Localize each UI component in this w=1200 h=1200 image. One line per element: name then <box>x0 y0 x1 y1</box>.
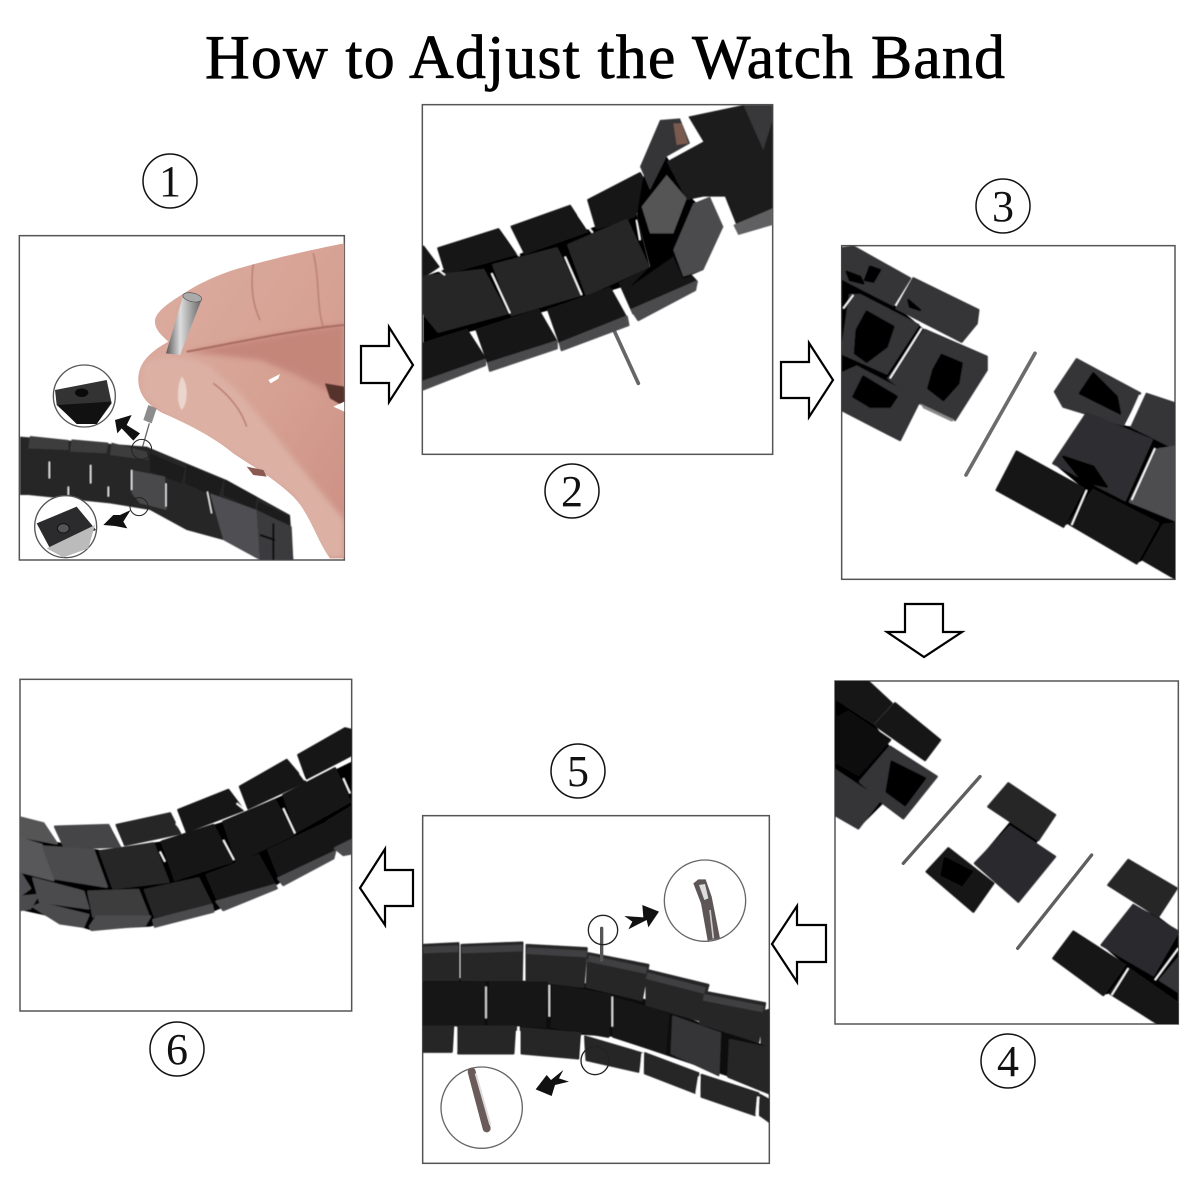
pin B <box>1018 855 1092 948</box>
right links <box>1053 860 1178 1024</box>
left links <box>842 247 987 440</box>
protruding pin <box>600 926 604 962</box>
arrow: step 5 to 6 <box>360 849 413 925</box>
step number 4 <box>981 1034 1035 1088</box>
step number 5 <box>551 744 605 798</box>
finished band <box>21 728 352 930</box>
arrow: step 3 to 4 <box>887 604 962 657</box>
step number 3 <box>976 179 1030 233</box>
arrow: step 4 to 5 <box>772 906 826 982</box>
loose pin <box>966 353 1035 475</box>
step number 2: 2 <box>561 467 583 516</box>
step number 1 <box>143 154 197 208</box>
removed link <box>927 783 1055 912</box>
panel: step 3 pin removed from links <box>842 246 1175 579</box>
reassembled band <box>423 943 769 1122</box>
arrow: step 2 to 3 <box>781 343 833 417</box>
hand <box>138 243 344 558</box>
band <box>20 436 293 560</box>
step number 2 <box>545 464 599 518</box>
panel: step 5 reinserting pin <box>423 816 769 1163</box>
panel: step 1 hand inserting tool into band <box>19 236 344 560</box>
step number 6 <box>150 1022 204 1076</box>
right links <box>997 359 1175 578</box>
panel: step 2 band with pin pushed out <box>422 105 773 454</box>
icon: pin tool <box>142 291 203 450</box>
watch links <box>423 173 697 389</box>
callout: lower pin detail <box>441 1047 609 1148</box>
step number 1: 1 <box>159 157 181 206</box>
arrow: step 1 to 2 <box>361 327 413 402</box>
callout: upper pin detail <box>588 860 746 945</box>
callout: pin end detail <box>35 496 148 558</box>
callout: hole detail <box>53 365 152 459</box>
title: How to Adjust the Watch Band <box>205 24 1005 92</box>
pin A <box>903 777 980 863</box>
step number 6: 6 <box>166 1025 188 1074</box>
step number 3: 3 <box>992 182 1014 231</box>
left links <box>835 682 940 828</box>
step number 5: 5 <box>567 747 589 796</box>
panel: step 6 finished band <box>20 679 352 1011</box>
pin <box>612 330 640 386</box>
clasp <box>630 105 773 287</box>
step number 4: 4 <box>997 1037 1019 1086</box>
panel: step 4 link removed with two pins <box>835 681 1178 1024</box>
